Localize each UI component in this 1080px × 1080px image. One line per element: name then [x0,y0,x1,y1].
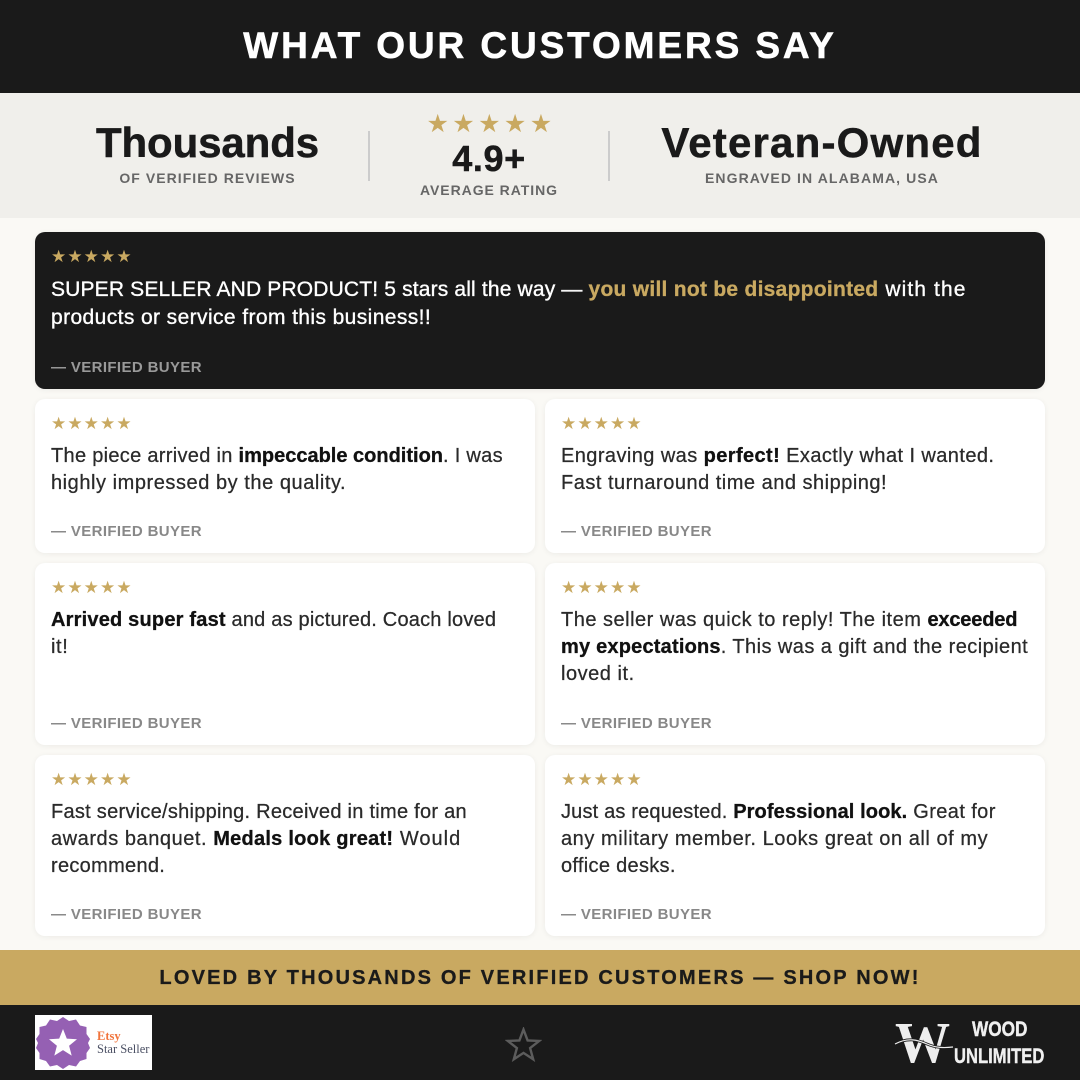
stat: veteran-owned: ENGRAVED IN ALABAMA, USA [705,170,939,186]
review text: recommend. [51,855,165,877]
footer band [0,1005,1080,1080]
review text: highly impressed by the quality. [51,472,346,494]
stat: average rating: 4.9+ [452,138,526,179]
attribution: — VERIFIED BUYER [51,523,202,540]
review text [561,801,996,877]
rating stars: ★★★★★ [51,247,133,267]
review card 4 [545,563,1045,745]
stat: thousands of reviews: OF VERIFIED REVIEWS [119,170,296,186]
logo text: WOOD [972,1018,1027,1041]
rating stars: ★★★★★ [561,414,643,434]
icon: swoosh [894,1038,953,1049]
rating stars: ★★★★★ [561,770,643,790]
divider [608,131,610,181]
review text: my expectations. This was a gift and the recipient [561,636,1028,658]
review text: The seller was quick to reply! The item exceeded [561,609,1017,631]
stats band [0,93,1080,218]
badge text: Star Seller [97,1042,149,1056]
rating stars: ★★★★★ [51,770,133,790]
stat: average rating: AVERAGE RATING [420,182,558,198]
divider [368,131,370,181]
stat: average rating [420,109,558,198]
review text: loved it. [561,663,635,685]
header band [0,0,1080,93]
review card 3 [35,563,535,745]
featured review [35,232,1045,389]
review text [561,609,1028,685]
attribution: — VERIFIED BUYER [561,906,712,923]
review card 6 [545,755,1045,936]
review card 1 [35,399,535,553]
review text: products or service from this business!! [51,306,431,329]
attribution: — VERIFIED BUYER [51,359,202,376]
call to action banner [0,950,1080,1005]
badge text: Etsy [97,1029,121,1043]
review text: Fast turnaround time and shipping! [561,472,887,494]
title: WHAT OUR CUSTOMERS SAY [243,25,837,66]
icon: purple star badge [36,1017,90,1069]
review text: The piece arrived in impeccable condition. I was [51,445,503,467]
review text: Arrived super fast and as pictured. Coach loved [51,609,496,631]
rating stars: ★★★★★ [51,414,133,434]
review text: Engraving was perfect! Exactly what I wanted. [561,445,994,467]
rating stars: ★★★★★ [51,578,133,598]
attribution: — VERIFIED BUYER [561,523,712,540]
review text [51,801,467,877]
wood unlimited logo [894,1010,1044,1075]
stat: veteran-owned: Veteran-Owned [661,119,983,166]
wood unlimited logo: UNLIMITED [954,1045,1044,1068]
icon: outline star [505,1027,542,1062]
review text [561,445,994,494]
review text: awards banquet. Medals look great! Would [51,828,461,850]
review text: office desks. [561,855,676,877]
review text [51,609,496,658]
review card 2 [545,399,1045,553]
banner text: LOVED BY THOUSANDS OF VERIFIED CUSTOMERS — SHOP NOW! [159,967,921,989]
review text: it! [51,636,68,658]
attribution: — VERIFIED BUYER [561,715,712,732]
review text [51,445,503,494]
review text: Just as requested. Professional look. Great for [561,801,996,823]
attribution: — VERIFIED BUYER [51,906,202,923]
review text: SUPER SELLER AND PRODUCT! 5 stars all the way — you will not be disappointed with the [51,278,967,301]
stat: thousands of reviews: Thousands [96,119,319,166]
rating stars: ★★★★★ [561,578,643,598]
etsy star seller badge [35,1015,152,1070]
stat: average rating: ★★★★★ [426,109,556,138]
attribution: — VERIFIED BUYER [51,715,202,732]
review text: Fast service/shipping. Received in time for an [51,801,467,823]
review text: any military member. Looks great on all of my [561,828,988,850]
review text [51,278,967,329]
review card 5 [35,755,535,936]
badge text [97,1029,150,1056]
icon: W monogram: W [895,1010,950,1075]
